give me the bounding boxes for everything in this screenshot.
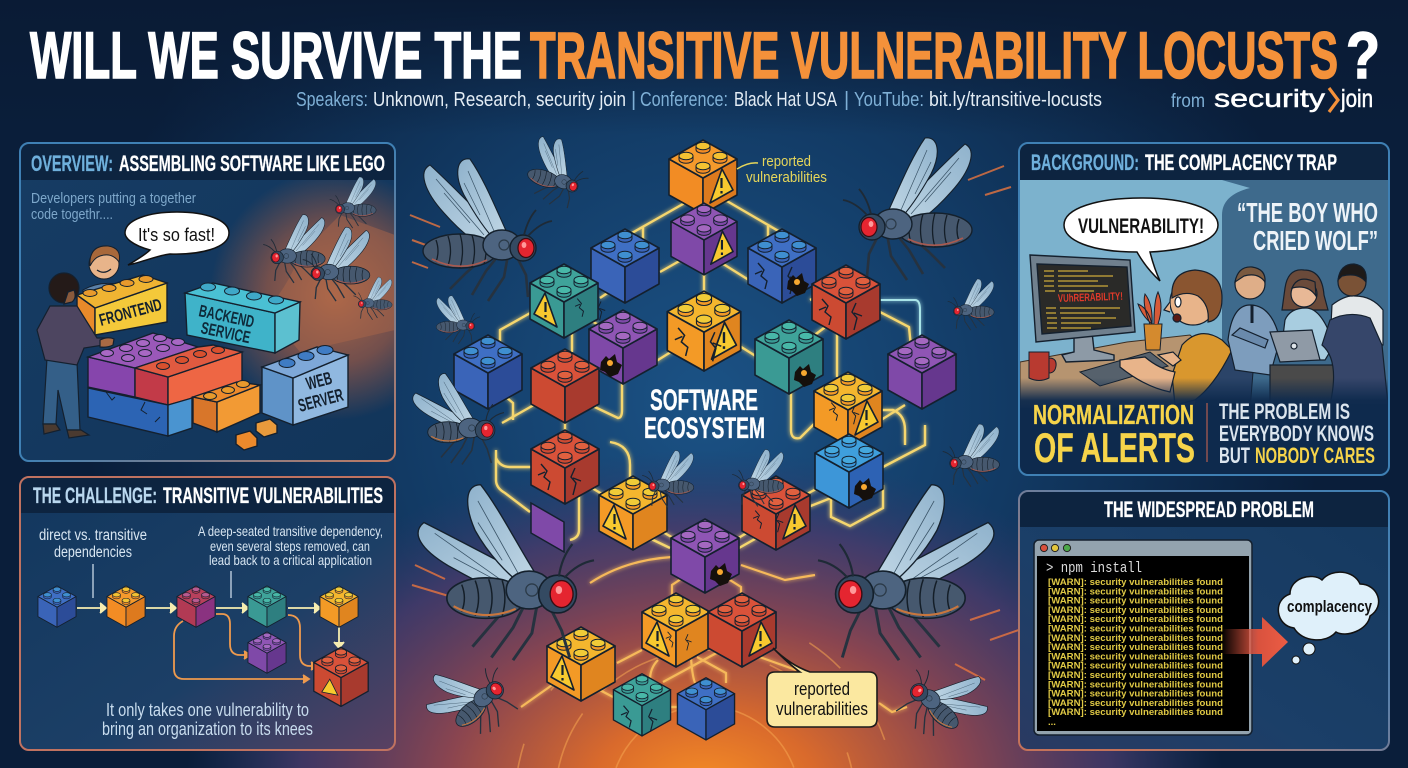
brick: blue plain left xyxy=(454,335,522,409)
intro text: code togethr.... xyxy=(31,206,113,223)
panel: widespread problem xyxy=(1019,491,1389,750)
subtitle: speakers, conference, youtube: Speakers: xyxy=(296,89,368,111)
brick: teal with hole xyxy=(755,320,823,394)
desk xyxy=(1020,334,1192,400)
callout: reported vulnerabilities: vulnerabilities xyxy=(776,699,868,719)
note: deep-seated dependency: even several steps removed, can xyxy=(210,538,370,554)
locust: small left xyxy=(436,296,480,344)
normalization of alerts: NORMALIZATION xyxy=(1033,399,1194,430)
connection lines lower xyxy=(521,557,907,712)
heading: ASSEMBLING SOFTWARE LIKE LEGO xyxy=(119,151,385,176)
title xyxy=(30,18,1380,92)
the problem text xyxy=(1219,399,1375,468)
heading: OVERVIEW: xyxy=(31,151,113,176)
center label: ECOSYSTEM xyxy=(644,412,765,445)
panel header band xyxy=(1019,143,1389,180)
brick: yellow with warning xyxy=(814,372,882,446)
panel header band xyxy=(20,143,395,180)
terminal window xyxy=(1034,540,1252,735)
office scene xyxy=(1020,180,1388,400)
brick: blue cracked xyxy=(748,229,816,303)
brick: red lower left cracked xyxy=(531,430,599,504)
panel border xyxy=(1019,143,1389,475)
panel border xyxy=(20,143,395,461)
orange dust cloud xyxy=(216,180,394,416)
brick: chain orange xyxy=(107,586,145,627)
brick: chain magenta xyxy=(177,586,215,627)
terminal output: [WARN]: security vulnerabilities found xyxy=(1048,642,1223,653)
locust: bottom left xyxy=(414,641,527,755)
terminal output: [WARN]: security vulnerabilities found xyxy=(1048,679,1223,690)
thought cloud: complacency: complacency xyxy=(1287,597,1372,616)
terminal output: ... xyxy=(1048,717,1056,728)
the problem text: THE PROBLEM IS xyxy=(1219,399,1350,424)
terminal output: [WARN]: security vulnerabilities found xyxy=(1048,586,1223,597)
brick: teal bottom cracked xyxy=(613,674,671,736)
brick: red cracked xyxy=(812,265,880,339)
subtitle: speakers, conference, youtube: bit.ly/transitive-locusts xyxy=(929,89,1102,111)
brick: purple with warning xyxy=(671,203,737,275)
logo: from security join: security xyxy=(1214,85,1326,113)
title: ? xyxy=(1346,18,1380,92)
locust: small top xyxy=(521,133,597,213)
subtitle: speakers, conference, youtube: | xyxy=(844,89,849,111)
brick: blue xyxy=(591,229,659,303)
keyboard xyxy=(1080,352,1168,386)
subtitle: speakers, conference, youtube: | xyxy=(631,89,636,111)
intro text xyxy=(31,190,196,223)
label: reported vulnerabilities top: vulnerabilities xyxy=(746,169,827,186)
brick: purple right xyxy=(888,335,956,409)
brick: purple with hole xyxy=(589,310,657,384)
mug xyxy=(1029,352,1056,380)
terminal output: [WARN]: security vulnerabilities found xyxy=(1048,624,1223,634)
locust: large top right xyxy=(843,138,972,280)
conclusion text: bring an organization to its knees xyxy=(102,718,313,739)
logo: from security join: join xyxy=(1340,85,1373,113)
terminal output: [WARN]: security vulnerabilities found xyxy=(1048,651,1223,662)
intro text: Developers putting a together xyxy=(31,190,196,207)
panel: background xyxy=(1019,143,1389,476)
terminal output: [WARN]: security vulnerabilities found xyxy=(1048,577,1223,588)
arrows: transitive paths xyxy=(174,614,317,683)
heading: TRANSITIVE VULNERABILITIES xyxy=(163,483,383,508)
brick: red with warning lower right xyxy=(742,476,810,550)
the problem text: BUT xyxy=(1219,443,1250,468)
purple slab xyxy=(531,503,564,552)
logo: from security join: from xyxy=(1171,91,1205,112)
note: deep-seated dependency: A deep-seated transitive dependency, xyxy=(198,523,383,539)
locust: large lower right xyxy=(818,485,994,660)
chair xyxy=(1196,354,1254,400)
speech bubble: vulnerability: VULNERABILITY! xyxy=(1078,215,1204,238)
subtitle: speakers, conference, youtube: YouTube: xyxy=(854,89,924,111)
normalization of alerts xyxy=(1033,399,1195,471)
terminal output: [WARN]: security vulnerabilities found xyxy=(1048,605,1223,616)
brick: web server: SERVER xyxy=(296,385,345,416)
locust: on red brick xyxy=(732,450,784,506)
brick: yellow bottom left with warning xyxy=(547,627,615,701)
note: direct vs transitive: dependencies xyxy=(54,544,132,561)
brick: frontend: FRONTEND xyxy=(97,295,164,330)
note: deep-seated dependency xyxy=(198,523,383,598)
brick: sky blue with hole xyxy=(815,434,883,508)
brick: critical red xyxy=(314,647,368,706)
brick: yellow with warning bottom xyxy=(642,593,710,667)
connection line cyan xyxy=(880,300,920,343)
label: reported vulnerabilities top xyxy=(737,153,827,186)
callout: reported vulnerabilities: reported xyxy=(794,679,850,699)
speech bubble: It's so fast! xyxy=(138,225,215,245)
brick: web server: WEB xyxy=(304,368,334,394)
brick: central yellow with warning xyxy=(667,291,741,371)
locust: medium left xyxy=(413,373,504,464)
terminal output xyxy=(1048,577,1223,728)
developer front xyxy=(37,273,114,438)
panel border xyxy=(20,477,395,750)
label: reported vulnerabilities top: reported xyxy=(762,153,811,170)
panel header band xyxy=(1019,491,1389,527)
brick: red with warning bottom xyxy=(708,593,776,667)
conclusion text: It only takes one vulnerability to xyxy=(106,699,309,720)
terminal output: [WARN]: security vulnerabilities found xyxy=(1048,614,1223,625)
locust: large lower left xyxy=(418,485,594,660)
panel header band xyxy=(20,477,395,513)
terminal output: [WARN]: security vulnerabilities found xyxy=(1048,670,1223,681)
heading: BACKGROUND: xyxy=(1031,150,1139,175)
brick: teal with warning xyxy=(530,264,605,338)
arrows: dependency chain xyxy=(77,603,344,648)
terminal output: [WARN]: security vulnerabilities found xyxy=(1048,689,1223,700)
developer back xyxy=(83,246,122,300)
brick: chain purple xyxy=(248,632,286,673)
locust: on yellow brick xyxy=(642,451,694,507)
note: direct vs transitive xyxy=(39,527,147,598)
brick stack xyxy=(88,333,277,450)
brick: central purple with hole xyxy=(671,519,739,593)
brick: blue bottom xyxy=(677,678,735,740)
monitor code lines xyxy=(1044,271,1120,328)
terminal output: [WARN]: security vulnerabilities found xyxy=(1048,596,1223,607)
note: deep-seated dependency: lead back to a critical application xyxy=(209,552,372,568)
brick: web server xyxy=(262,346,348,425)
locust: small right xyxy=(943,424,999,487)
quote: the boy who cried wolf xyxy=(1237,197,1378,256)
boy xyxy=(1120,270,1232,405)
plant cup xyxy=(1138,292,1162,350)
locust: small right upper xyxy=(948,279,994,330)
brick: chain yellow xyxy=(320,586,358,627)
terminal output: [WARN]: security vulnerabilities found xyxy=(1048,707,1223,718)
subtitle: speakers, conference, youtube: Conference: xyxy=(640,89,728,111)
logo: from security join xyxy=(1171,85,1373,113)
bottom fade xyxy=(1020,378,1388,410)
terminal command: > npm install xyxy=(1046,560,1142,577)
locust: bottom right xyxy=(887,643,1000,757)
brick: yellow lower left with warning xyxy=(599,476,667,550)
monitor alert text: VUhRERABILITY! xyxy=(1058,291,1123,305)
note: direct vs transitive: direct vs. transitive xyxy=(39,527,147,544)
coworker left xyxy=(1228,267,1280,375)
motion streaks xyxy=(410,166,1030,680)
speech bubble xyxy=(125,212,229,265)
coworker middle xyxy=(1269,269,1333,400)
panel border xyxy=(1019,491,1389,750)
heading xyxy=(33,483,383,508)
terminal output: [WARN]: security vulnerabilities found xyxy=(1048,698,1223,709)
brick: frontend xyxy=(77,275,167,335)
center label: SOFTWARE xyxy=(650,384,758,417)
callout: reported vulnerabilities xyxy=(767,648,877,727)
coworker right xyxy=(1322,264,1388,405)
terminal output: [WARN]: security vulnerabilities found xyxy=(1048,661,1223,672)
monitor xyxy=(1030,255,1135,362)
brick: red left xyxy=(531,349,599,423)
locusts attacking xyxy=(263,177,392,320)
brick: backend service: BACKEND xyxy=(197,301,256,332)
heading xyxy=(1031,150,1337,175)
central diagram: software ecosystem xyxy=(410,133,1030,768)
conclusion text xyxy=(102,699,313,739)
panel: overview xyxy=(20,143,395,461)
terminal output: [WARN]: security vulnerabilities found xyxy=(1048,633,1223,644)
locust: large top left xyxy=(423,159,552,301)
brick: top orange with warning xyxy=(669,140,737,214)
thought cloud: complacency xyxy=(1278,572,1379,664)
subtitle: speakers, conference, youtube: Unknown, Research, security join xyxy=(373,89,626,111)
normalization of alerts: OF ALERTS xyxy=(1034,424,1195,471)
heading: THE CHALLENGE: xyxy=(33,483,157,508)
brick: backend service: SERVICE xyxy=(199,318,252,347)
brick: backend service xyxy=(185,283,300,353)
heading xyxy=(31,151,385,176)
panel: the challenge xyxy=(20,477,395,750)
title: WILL WE SURVIVE THE xyxy=(30,18,522,92)
subtitle: speakers, conference, youtube xyxy=(296,89,1102,111)
brick: chain blue xyxy=(38,586,76,627)
connection lines upper xyxy=(496,197,925,548)
center label xyxy=(644,384,765,445)
speech bubble: vulnerability xyxy=(1064,198,1218,281)
subtitle: speakers, conference, youtube: Black Hat USA xyxy=(734,89,838,111)
brick: chain teal xyxy=(248,586,286,627)
arrow to complacency xyxy=(1222,617,1288,667)
bottom shockwave arcs xyxy=(518,612,892,768)
